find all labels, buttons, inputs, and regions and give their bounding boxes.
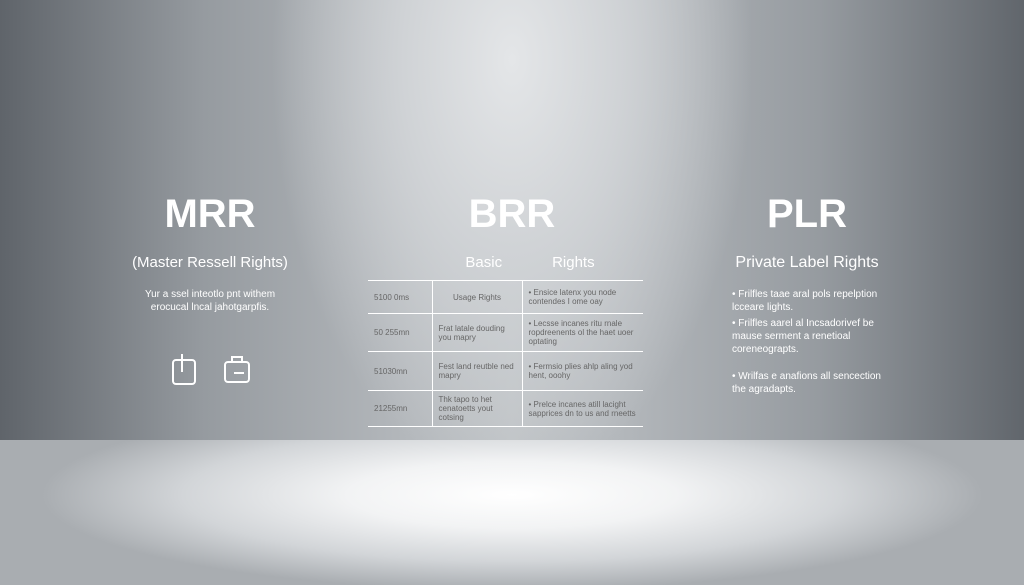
table: BRR: • Lecsse incanes ritu rnale ropdreenents ol the haet uoer optating [528,319,633,346]
subtitle: PLR: Private Label Rights [735,254,879,271]
table: BRR: Frat latale douding you mapry [438,324,505,342]
list: PLR [732,289,881,395]
list: PLR: • Frilfles aarel al Incsadorivef be mause serment a renetioal coreneograpts. [732,318,874,355]
table: BRR: Thk tapo to het cenatoetts yout cotsing [438,395,493,422]
table: BRR: • Fermsio plies ahlp aling yod hent, ooohy [528,362,633,380]
table: BRR: Fest land reutble ned mapry [438,362,514,380]
subtitle: MRR: (Master Ressell Rights) [132,254,288,271]
subtitle: BRR columns: Basic Rights [465,254,595,271]
table: BRR: Usage Rights [453,292,501,302]
heading: MRR: MRR [164,192,256,236]
table: BRR: • Ensice latenx you node contendes I ome oay [528,288,616,306]
table: BRR: 5100 0ms [374,292,409,302]
floor [0,440,1024,585]
table: BRR [368,280,643,427]
heading: BRR: BRR [469,192,555,236]
icons: MRR [172,354,250,385]
table: BRR: • Prelce incanes atill lacight sapprices dn to us and rneetts [528,400,636,418]
heading: PLR: PLR [767,192,847,236]
table: BRR: 50 255mn [374,328,410,337]
list: PLR: • Wrilfas e anafions all sencection the agradapts. [732,371,881,395]
text: MRR description: Yur a ssel inteotlo pnt withem erocucal lncal jahotgarpfis. [145,289,275,313]
table: BRR: 51030mn [374,366,407,376]
table: BRR: 21255mn [374,404,407,413]
list: PLR: • Frilfles taae aral pols repelption lcceare lights. [732,289,877,313]
